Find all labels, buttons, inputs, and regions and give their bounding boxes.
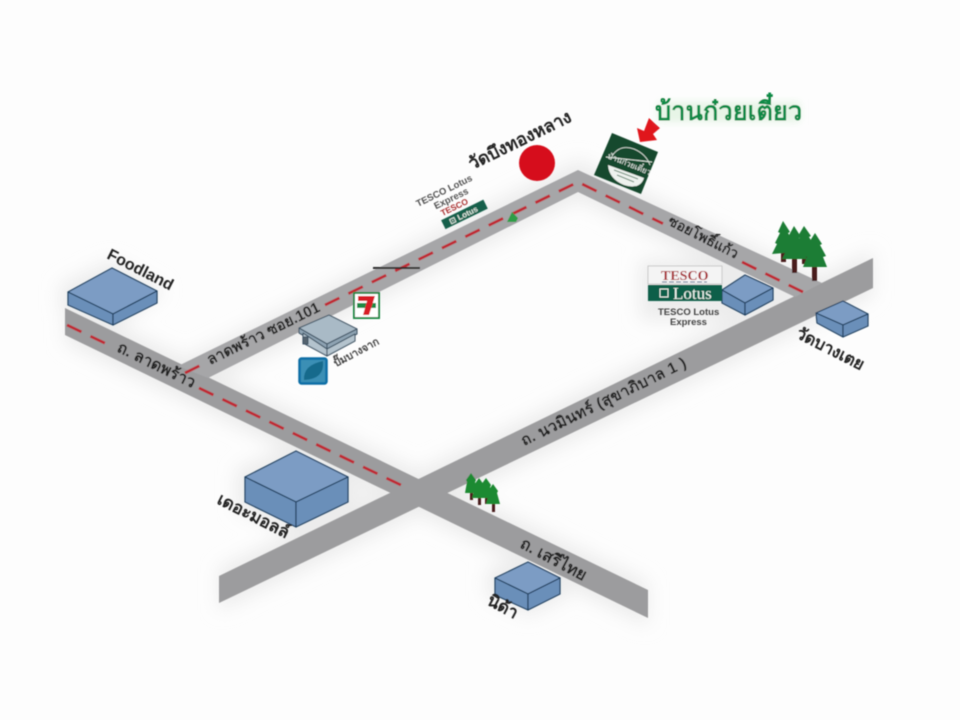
building: NIDA: [495, 562, 560, 610]
building: Wat Bang Toei: [816, 301, 868, 337]
label: Wat Bueng Thonglang: วัดบึงทองหลาง: [465, 106, 574, 174]
trees: upper right: [772, 221, 827, 281]
label: Tesco Lotus Express: Express: [670, 317, 707, 328]
building: Foodland: [68, 268, 157, 325]
label: soi 101: ลาดพร้าว ซอย.101: [204, 299, 323, 369]
label: NIDA: นิด้า: [484, 591, 521, 623]
logo: 7-Eleven: [354, 293, 379, 318]
arrow to restaurant: [637, 118, 660, 142]
crossing line: [373, 267, 420, 269]
logo: Tesco Lotus: [648, 266, 722, 303]
label: Tesco Lotus Express upper: Express: [432, 186, 470, 212]
small green marker: [507, 212, 518, 222]
label: Foodland: Foodland: [104, 246, 176, 294]
label: Tesco Lotus Express upper: TESCO Lotus: [414, 173, 474, 210]
label: Wat Bang Toei: วัดบางเตย: [793, 325, 867, 374]
road: ถ. ลาดพร้าว / ถ. เสรีไทย: [65, 308, 648, 618]
label: Tesco Lotus Express: TESCO Lotus: [658, 307, 719, 318]
logo: restaurant: บ้านก๋วยเตี๋ยว: [606, 149, 653, 177]
label: soi Pho Kaeo: ซอยโพธิ์แก้ว: [666, 210, 743, 262]
logo: Bangchak: [300, 358, 326, 384]
label: Bangchak: ปั๊มบางจาก: [330, 333, 381, 370]
building: grey station: [299, 315, 357, 356]
title: restaurant name: บ้านก๋วยเตี๋ยว: [655, 92, 802, 126]
label: Tesco Lotus Express upper: [414, 173, 488, 236]
label: Tesco Lotus Express upper: TESCO: [439, 196, 470, 218]
label: Seri Thai road: ถ. เสรีไทย: [517, 533, 591, 585]
road: ถ. นวมินทร์: [219, 258, 873, 603]
road: ลาดพร้าว ซอย 101 and ซอยโพธิ์แก้ว: [178, 170, 822, 378]
logo: Tesco Lotus: Lotus: [673, 284, 712, 303]
route dashes on soi: [185, 182, 805, 373]
label: Nawamin road: ถ. นวมินทร์ (สุขาภิบาล 1 ): [518, 354, 690, 450]
route dashes on ลาดพร้าว: [67, 325, 405, 487]
label: Tesco Lotus Express: [658, 307, 719, 328]
logo: Tesco Lotus: TESCO: [661, 269, 709, 284]
restaurant name glow: [658, 102, 800, 122]
label: Lat Phrao road: ถ. ลาดพร้าว: [114, 338, 198, 392]
building: Tesco Lotus: [722, 275, 773, 315]
building: The Mall: [245, 451, 348, 527]
trees: lower: [465, 473, 500, 512]
logo: restaurant: [594, 133, 658, 194]
red circle: Wat Bueng Thonglang: [519, 145, 555, 181]
label: The Mall: เดอะมอลล์: [214, 489, 293, 542]
label: Tesco Lotus Express upper: ⊡ Lotus: [448, 204, 480, 226]
